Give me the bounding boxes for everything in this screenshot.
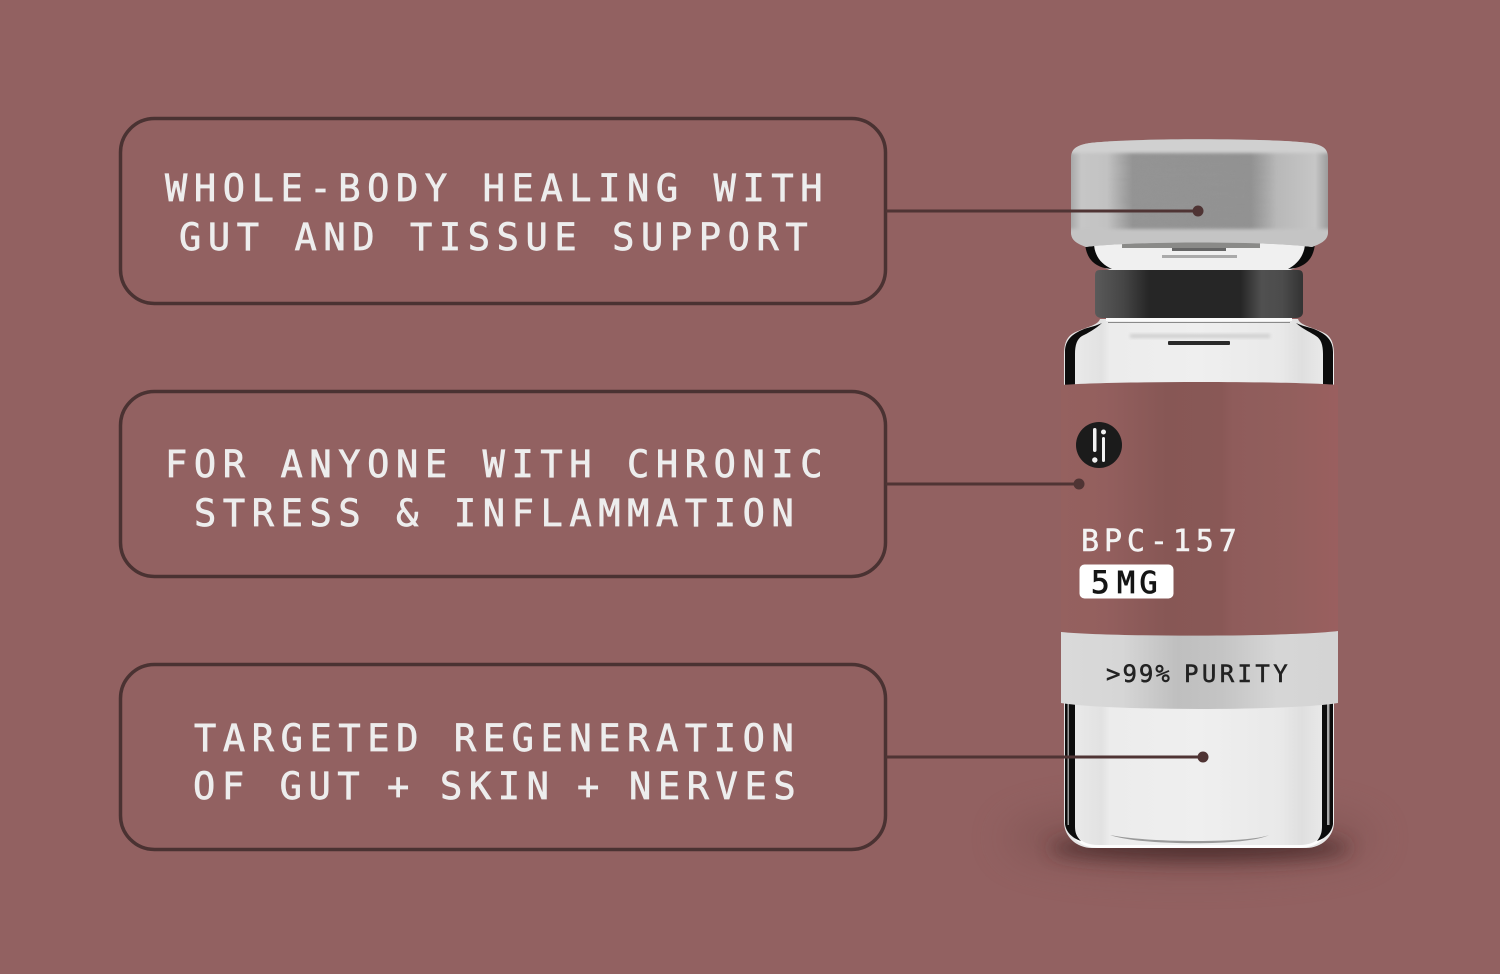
callout text 2 bbox=[165, 443, 829, 535]
callout text 3: OF GUT bbox=[193, 765, 366, 808]
callout text 1 bbox=[165, 167, 829, 259]
purity text bbox=[1106, 660, 1291, 688]
callout box 1 bbox=[120, 118, 886, 304]
brand logo icon bbox=[1076, 422, 1122, 468]
vial shoulder bbox=[1064, 318, 1334, 386]
purity text: >99% bbox=[1106, 660, 1172, 688]
vial crimp collar bbox=[1095, 270, 1303, 318]
callout text 3 bbox=[193, 717, 802, 808]
callout 1 bbox=[120, 118, 1204, 304]
callout 3 bbox=[120, 664, 1208, 850]
vial cap bbox=[1071, 139, 1328, 247]
dosage badge: MG bbox=[1117, 566, 1162, 601]
dosage badge: 5 bbox=[1091, 565, 1110, 601]
callout text 1: WHOLE-BODY HEALING WITH bbox=[165, 167, 829, 210]
callout text 3: + bbox=[577, 765, 606, 808]
callout 2 bbox=[120, 392, 1084, 576]
callout text 2: STRESS & INFLAMMATION bbox=[194, 492, 800, 535]
connector line 2 bbox=[886, 478, 1084, 490]
vial floor shadow bbox=[1005, 808, 1375, 868]
callout text 3: TARGETED REGENERATION bbox=[194, 717, 800, 760]
vial neck glass bbox=[1085, 241, 1315, 270]
callout box 2 bbox=[120, 392, 886, 576]
label: purity band bbox=[1061, 631, 1338, 709]
callout text 1: GUT AND TISSUE SUPPORT bbox=[179, 216, 814, 259]
label: product sticker bbox=[1061, 382, 1338, 636]
callout text 2: FOR ANYONE WITH CHRONIC bbox=[165, 443, 829, 486]
callout text 3: SKIN bbox=[440, 765, 556, 808]
product name: BPC-157 bbox=[1081, 524, 1242, 559]
vial bbox=[1005, 135, 1375, 868]
callout text 3: + bbox=[387, 765, 416, 808]
callout text 3: NERVES bbox=[629, 765, 802, 808]
connector line 3 bbox=[886, 752, 1208, 762]
callout box 3 bbox=[120, 664, 886, 850]
purity text: PURITY bbox=[1184, 660, 1291, 688]
dosage badge bbox=[1080, 564, 1174, 601]
vial lower body bbox=[1064, 700, 1334, 848]
connector line 1 bbox=[886, 206, 1204, 216]
